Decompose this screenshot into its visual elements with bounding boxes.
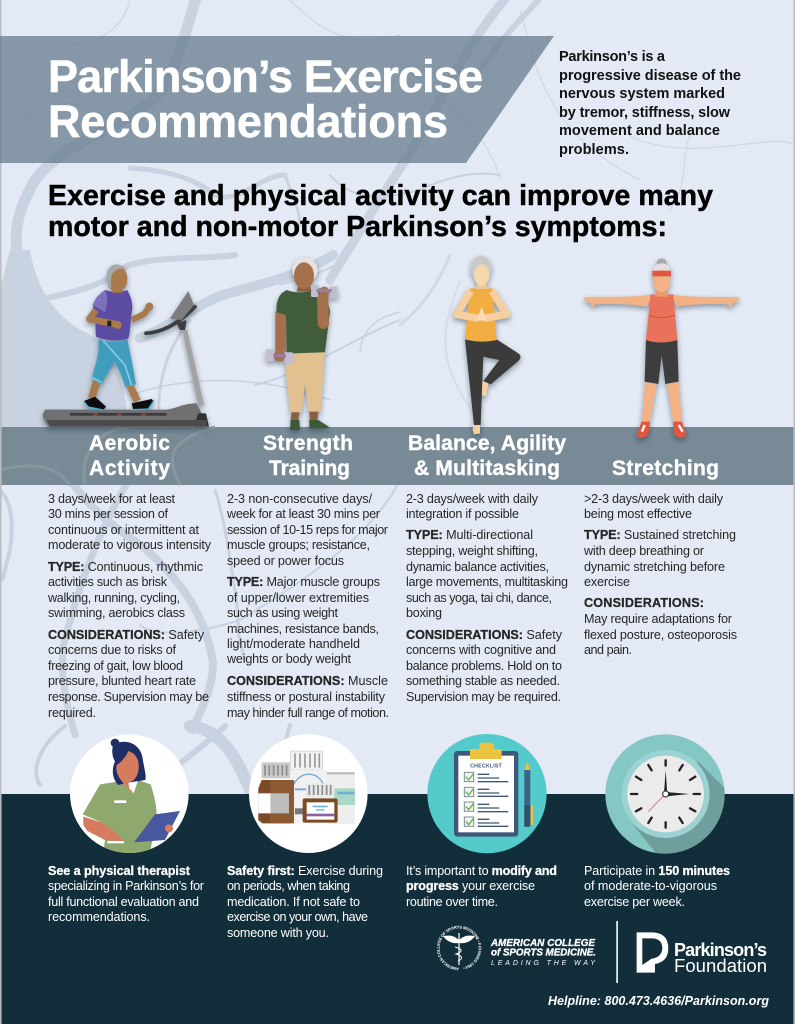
seal: AMERICAN COLLEGE OF SPORTS MEDICINE • FOUNDED 1954 • — [436, 926, 482, 970]
tip: safety first: someone with you. — [227, 926, 329, 940]
column: strength training text: of upper/lower extremities — [227, 591, 369, 605]
wordmark: Parkinson’s — [674, 940, 767, 960]
exercise label band — [0, 427, 795, 485]
runner — [84, 264, 154, 410]
column: balance, agility and multitasking text: 2-3 days/week with daily — [406, 492, 539, 506]
column: stretching text: CONSIDERATIONS: — [584, 596, 704, 610]
column: aerobic activity text: TYPE: Continuous, rhythmic — [48, 560, 203, 574]
wordmark — [674, 940, 767, 976]
background: neuron pattern — [0, 0, 795, 795]
column: strength training text: TYPE: Major muscle groups — [227, 575, 380, 589]
intro text: progressive disease of the — [559, 68, 741, 84]
column: balance, agility and multitasking text: TYPE: Multi-directional — [406, 528, 533, 542]
icon: checklist clipboard — [427, 734, 547, 853]
tip: modify and progress: routine over time. — [406, 895, 498, 909]
tip: physical therapist — [48, 864, 204, 924]
column: balance, agility and multitasking text: balance problems. Hold on to — [406, 659, 562, 673]
intro text: problems. — [559, 142, 629, 158]
intro text: Parkinson’s is a — [559, 49, 666, 65]
tip: modify and progress: It’s important to modify and — [406, 864, 557, 878]
P mark — [637, 932, 668, 973]
helpline: Helpline: 800.473.4636/Parkinson.org — [548, 994, 769, 1008]
column: stretching text: exercise — [584, 575, 630, 589]
column: strength training text: week for at least 30 mins per — [226, 507, 380, 521]
icon: medication bottles — [249, 734, 368, 853]
icon: clock — [605, 734, 730, 858]
exercise category headings: Aerobic — [89, 432, 170, 455]
column: strength training text: light/moderate handheld — [227, 637, 360, 651]
column: balance, agility and multitasking text: integration if possible — [406, 507, 519, 521]
column: aerobic activity text: moderate to vigorous intensity — [48, 538, 212, 552]
column: aerobic activity text: pressure, blunted heart rate — [48, 674, 196, 688]
tip: safety first: on periods, when taking — [227, 879, 350, 893]
column: strength training text: such as using weight — [227, 606, 338, 620]
checklist label: CHECKLIST — [470, 763, 503, 769]
intro text: movement and balance — [559, 123, 720, 139]
column: stretching text — [583, 492, 737, 657]
exercise category headings: Activity — [89, 457, 170, 480]
column: strength training text: machines, resistance bands, — [227, 622, 379, 636]
tip: physical therapist: specializing in Parkinson’s for — [48, 879, 204, 893]
column: aerobic activity text: walking, running, cycling, — [47, 591, 180, 605]
exercise category headings: Strength — [263, 432, 353, 455]
tip: safety first — [227, 864, 383, 940]
column: stretching text: and pain. — [584, 643, 632, 657]
column: balance, agility and multitasking text — [406, 492, 568, 704]
heading: Exercise and physical activity can improve many — [48, 180, 713, 212]
logo wordmark — [490, 938, 596, 967]
logo: Parkinson's Foundation — [637, 932, 767, 976]
logo wordmark: AMERICAN COLLEGE — [490, 938, 595, 949]
column: stretching text: with deep breathing or — [583, 544, 704, 558]
exercise category headings: Training — [269, 457, 350, 480]
tip: physical therapist: See a physical therapist — [48, 864, 191, 878]
column: stretching text: dynamic stretching before — [584, 560, 725, 574]
column: stretching text: being most effective — [584, 507, 692, 521]
tip: modify and progress: progress your exercise — [406, 879, 535, 893]
column: strength training text: weights or body weight — [226, 652, 352, 666]
exercise category headings — [89, 432, 719, 480]
tip: safety first: Safety first: Exercise during — [227, 864, 383, 878]
illustration: strength training man — [266, 257, 337, 430]
exercise category headings: Balance, Agility — [408, 432, 566, 455]
tip: physical therapist: full functional evaluation and — [48, 895, 199, 909]
intro text: nervous system marked — [559, 86, 725, 102]
tip: 150 minutes: of moderate-to-vigorous — [584, 879, 717, 893]
column: stretching text: TYPE: Sustained stretching — [584, 528, 736, 542]
title — [48, 51, 483, 147]
tip: 150 minutes — [584, 864, 730, 909]
column: strength training text: session of 10-15 reps for major — [227, 523, 388, 537]
logo wordmark: LEADING THE WAY — [491, 960, 596, 967]
column: balance, agility and multitasking text: something stable as needed. — [406, 674, 560, 688]
icon: physical therapist — [70, 734, 189, 853]
column: aerobic activity text: swimming, aerobics class — [48, 606, 185, 620]
intro text: by tremor, stiffness, slow — [559, 105, 731, 121]
column: aerobic activity text: required. — [48, 706, 96, 720]
column: aerobic activity text: 3 days/week for at least — [48, 492, 176, 506]
title: Recommendations — [48, 96, 448, 147]
column: aerobic activity text: CONSIDERATIONS: Safety — [48, 628, 205, 642]
column: strength training text: speed or power focus — [227, 554, 344, 568]
illustration: stretching woman — [584, 258, 739, 438]
exercise category headings: & Multitasking — [414, 457, 560, 480]
column: strength training text: may hinder full range of motion. — [227, 706, 389, 720]
column: aerobic activity text: response. Supervision may be — [48, 690, 209, 704]
column: balance, agility and multitasking text: CONSIDERATIONS: Safety — [406, 628, 563, 642]
tip: safety first: exercise on your own, have — [227, 910, 368, 924]
lower dark section — [0, 794, 795, 1024]
column: aerobic activity text: concerns due to risks of — [48, 643, 176, 657]
tip: physical therapist: recommendations. — [48, 910, 150, 924]
column: strength training text: stiffness or postural instability — [227, 690, 386, 704]
title: Parkinson’s Exercise — [48, 51, 483, 102]
column: balance, agility and multitasking text: dynamic balance activities, — [406, 560, 549, 574]
tip: modify and progress — [406, 864, 557, 909]
intro text — [559, 49, 741, 158]
heading: motor and non-motor Parkinson’s symptoms: — [48, 211, 667, 243]
column: balance, agility and multitasking text: large movements, multitasking — [406, 575, 568, 589]
tip: 150 minutes: Participate in 150 minutes — [584, 864, 730, 878]
column: strength training text: 2-3 non-consecutive days/ — [227, 492, 372, 506]
column: aerobic activity text — [47, 492, 212, 720]
column: aerobic activity text: freezing of gait, low blood — [48, 659, 183, 673]
logo wordmark: of SPORTS MEDICINE. — [491, 948, 596, 958]
column: balance, agility and multitasking text: boxing — [406, 606, 442, 620]
heading — [48, 180, 713, 243]
exercise category headings: Stretching — [612, 457, 719, 480]
tip: safety first: medication. If not safe to — [227, 895, 360, 909]
wordmark: Foundation — [674, 955, 767, 976]
column: aerobic activity text: activities such as brisk — [48, 575, 168, 589]
column: balance, agility and multitasking text: stepping, weight shifting, — [406, 544, 538, 558]
column: stretching text: flexed posture, osteoporosis — [584, 628, 737, 642]
column: balance, agility and multitasking text: Supervision may be required. — [406, 690, 561, 704]
treadmill — [43, 291, 209, 427]
logo: American College of Sports Medicine — [436, 926, 596, 970]
column: balance, agility and multitasking text: concerns with cognitive and — [406, 643, 556, 657]
title banner — [0, 36, 554, 163]
tip: 150 minutes: exercise per week. — [584, 895, 685, 909]
logo divider — [616, 921, 618, 983]
column: balance, agility and multitasking text: such as yoga, tai chi, dance, — [406, 591, 552, 605]
column: strength training text — [226, 492, 389, 720]
illustration: balance yoga woman — [457, 256, 520, 434]
column: aerobic activity text: continuous or intermittent at — [48, 523, 200, 537]
column: stretching text: May require adaptations for — [584, 612, 732, 626]
illustration: treadmill runner — [43, 264, 209, 427]
column: aerobic activity text: 30 mins per session of — [48, 507, 168, 521]
column: strength training text: muscle groups; resistance, — [227, 538, 370, 552]
column: strength training text: CONSIDERATIONS: Muscle — [227, 674, 388, 688]
column: stretching text: >2-3 days/week with daily — [584, 492, 724, 506]
